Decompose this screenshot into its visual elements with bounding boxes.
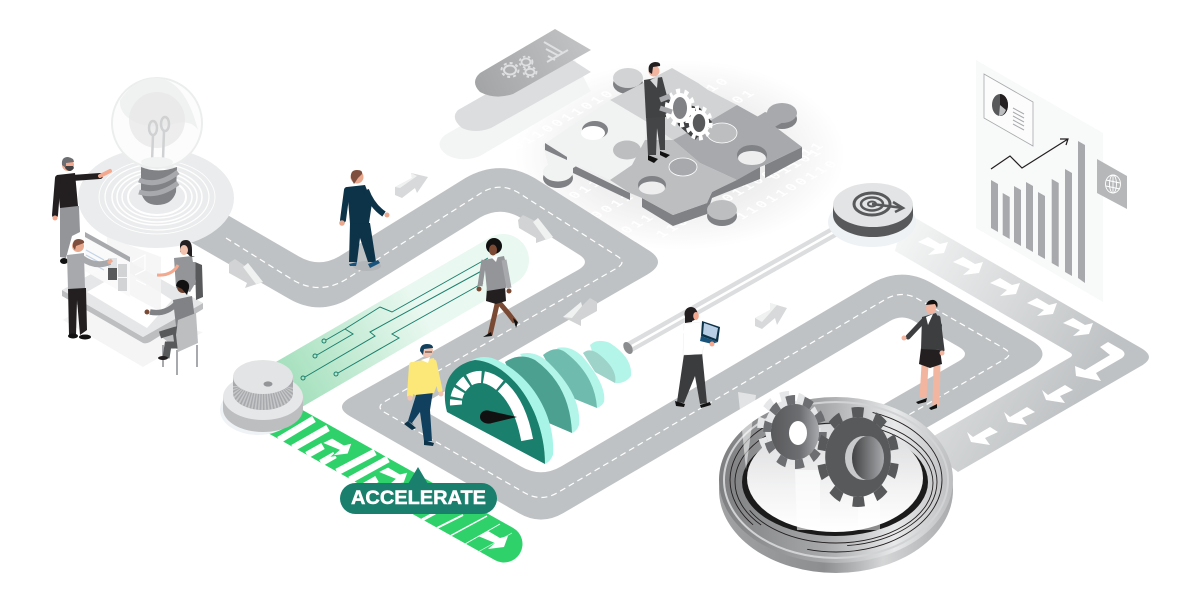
disc 2 [520,353,579,433]
disc 1 rim [470,357,553,464]
background: binary data glow: 0110 [617,206,671,237]
person: man in navy suit [339,170,390,271]
disc 3 [557,347,604,408]
person: man in black sweater [52,157,110,264]
icon: laptop [701,321,720,342]
piece: right [673,105,802,180]
bulb glass [112,78,202,168]
joints [669,158,697,176]
person: man holding gears [644,62,712,163]
disc 1 face [445,360,545,464]
background: binary data glow: 0110011010 [508,88,621,153]
background: binary data glow: 0110011011 [718,140,831,205]
puzzle thickness [543,74,802,226]
icon: small gear [761,396,817,460]
piece: top [610,68,737,140]
icon: bars on banner [544,42,568,62]
light beams [738,392,756,470]
piece: left [543,100,647,180]
person: woman with afro [476,238,518,337]
person: man with laptop [675,307,720,408]
road arrows [918,237,1124,445]
background: binary data glow: 1101100110 [732,158,845,223]
hole: left piece [582,121,608,139]
panel: bar chart [976,60,1103,302]
person: man in yellow sweater [404,344,444,446]
background: binary data glow [508,60,845,250]
callout: ACCELERATE [340,467,497,514]
filament [149,117,169,162]
person: woman in black suit [902,300,944,410]
panel: holographic screens [85,232,161,312]
trend arrow [991,139,1068,169]
road: outer arrow path [895,212,1149,472]
pie chart card [984,74,1033,146]
bulb base [141,167,177,205]
background: binary data glow: 01 [728,87,762,107]
person: seated man with chair [144,280,198,375]
dial knob [220,360,303,435]
background: binary data glow: 1100 [652,210,706,241]
person: woman seated [157,240,203,300]
gauge segments [456,377,528,445]
small road arrows [229,173,787,329]
needle [480,410,517,424]
icon: gears on banner [502,56,536,77]
background: binary data glow: 01101 [765,146,829,183]
icon: track arrows [322,438,352,456]
bars [991,141,1085,283]
holes [638,176,666,194]
background: binary data glow: 0011 [587,191,641,222]
road: main winding path [180,168,1042,520]
gear dish [719,392,953,573]
rod to target [621,224,848,356]
piece: bottom [610,140,737,215]
background: binary data glow: 1011 [555,177,609,208]
light bulb on platform [78,78,234,248]
green accelerate track [270,413,512,552]
icon: white gears [672,100,712,140]
disc 4 [590,341,631,383]
background: binary data glow: 10 [702,75,736,95]
table [62,257,203,367]
speedometer [445,341,631,464]
icon: target [828,183,916,247]
banners: gears and chart layers [439,29,591,159]
person: man standing at table [67,239,112,340]
icon: globe card [1097,159,1127,209]
panel: green circuit board [288,258,503,385]
puzzle [543,68,802,226]
icon: large gear [816,406,900,508]
callout: ACCELERATE: ACCELERATE [351,487,486,509]
